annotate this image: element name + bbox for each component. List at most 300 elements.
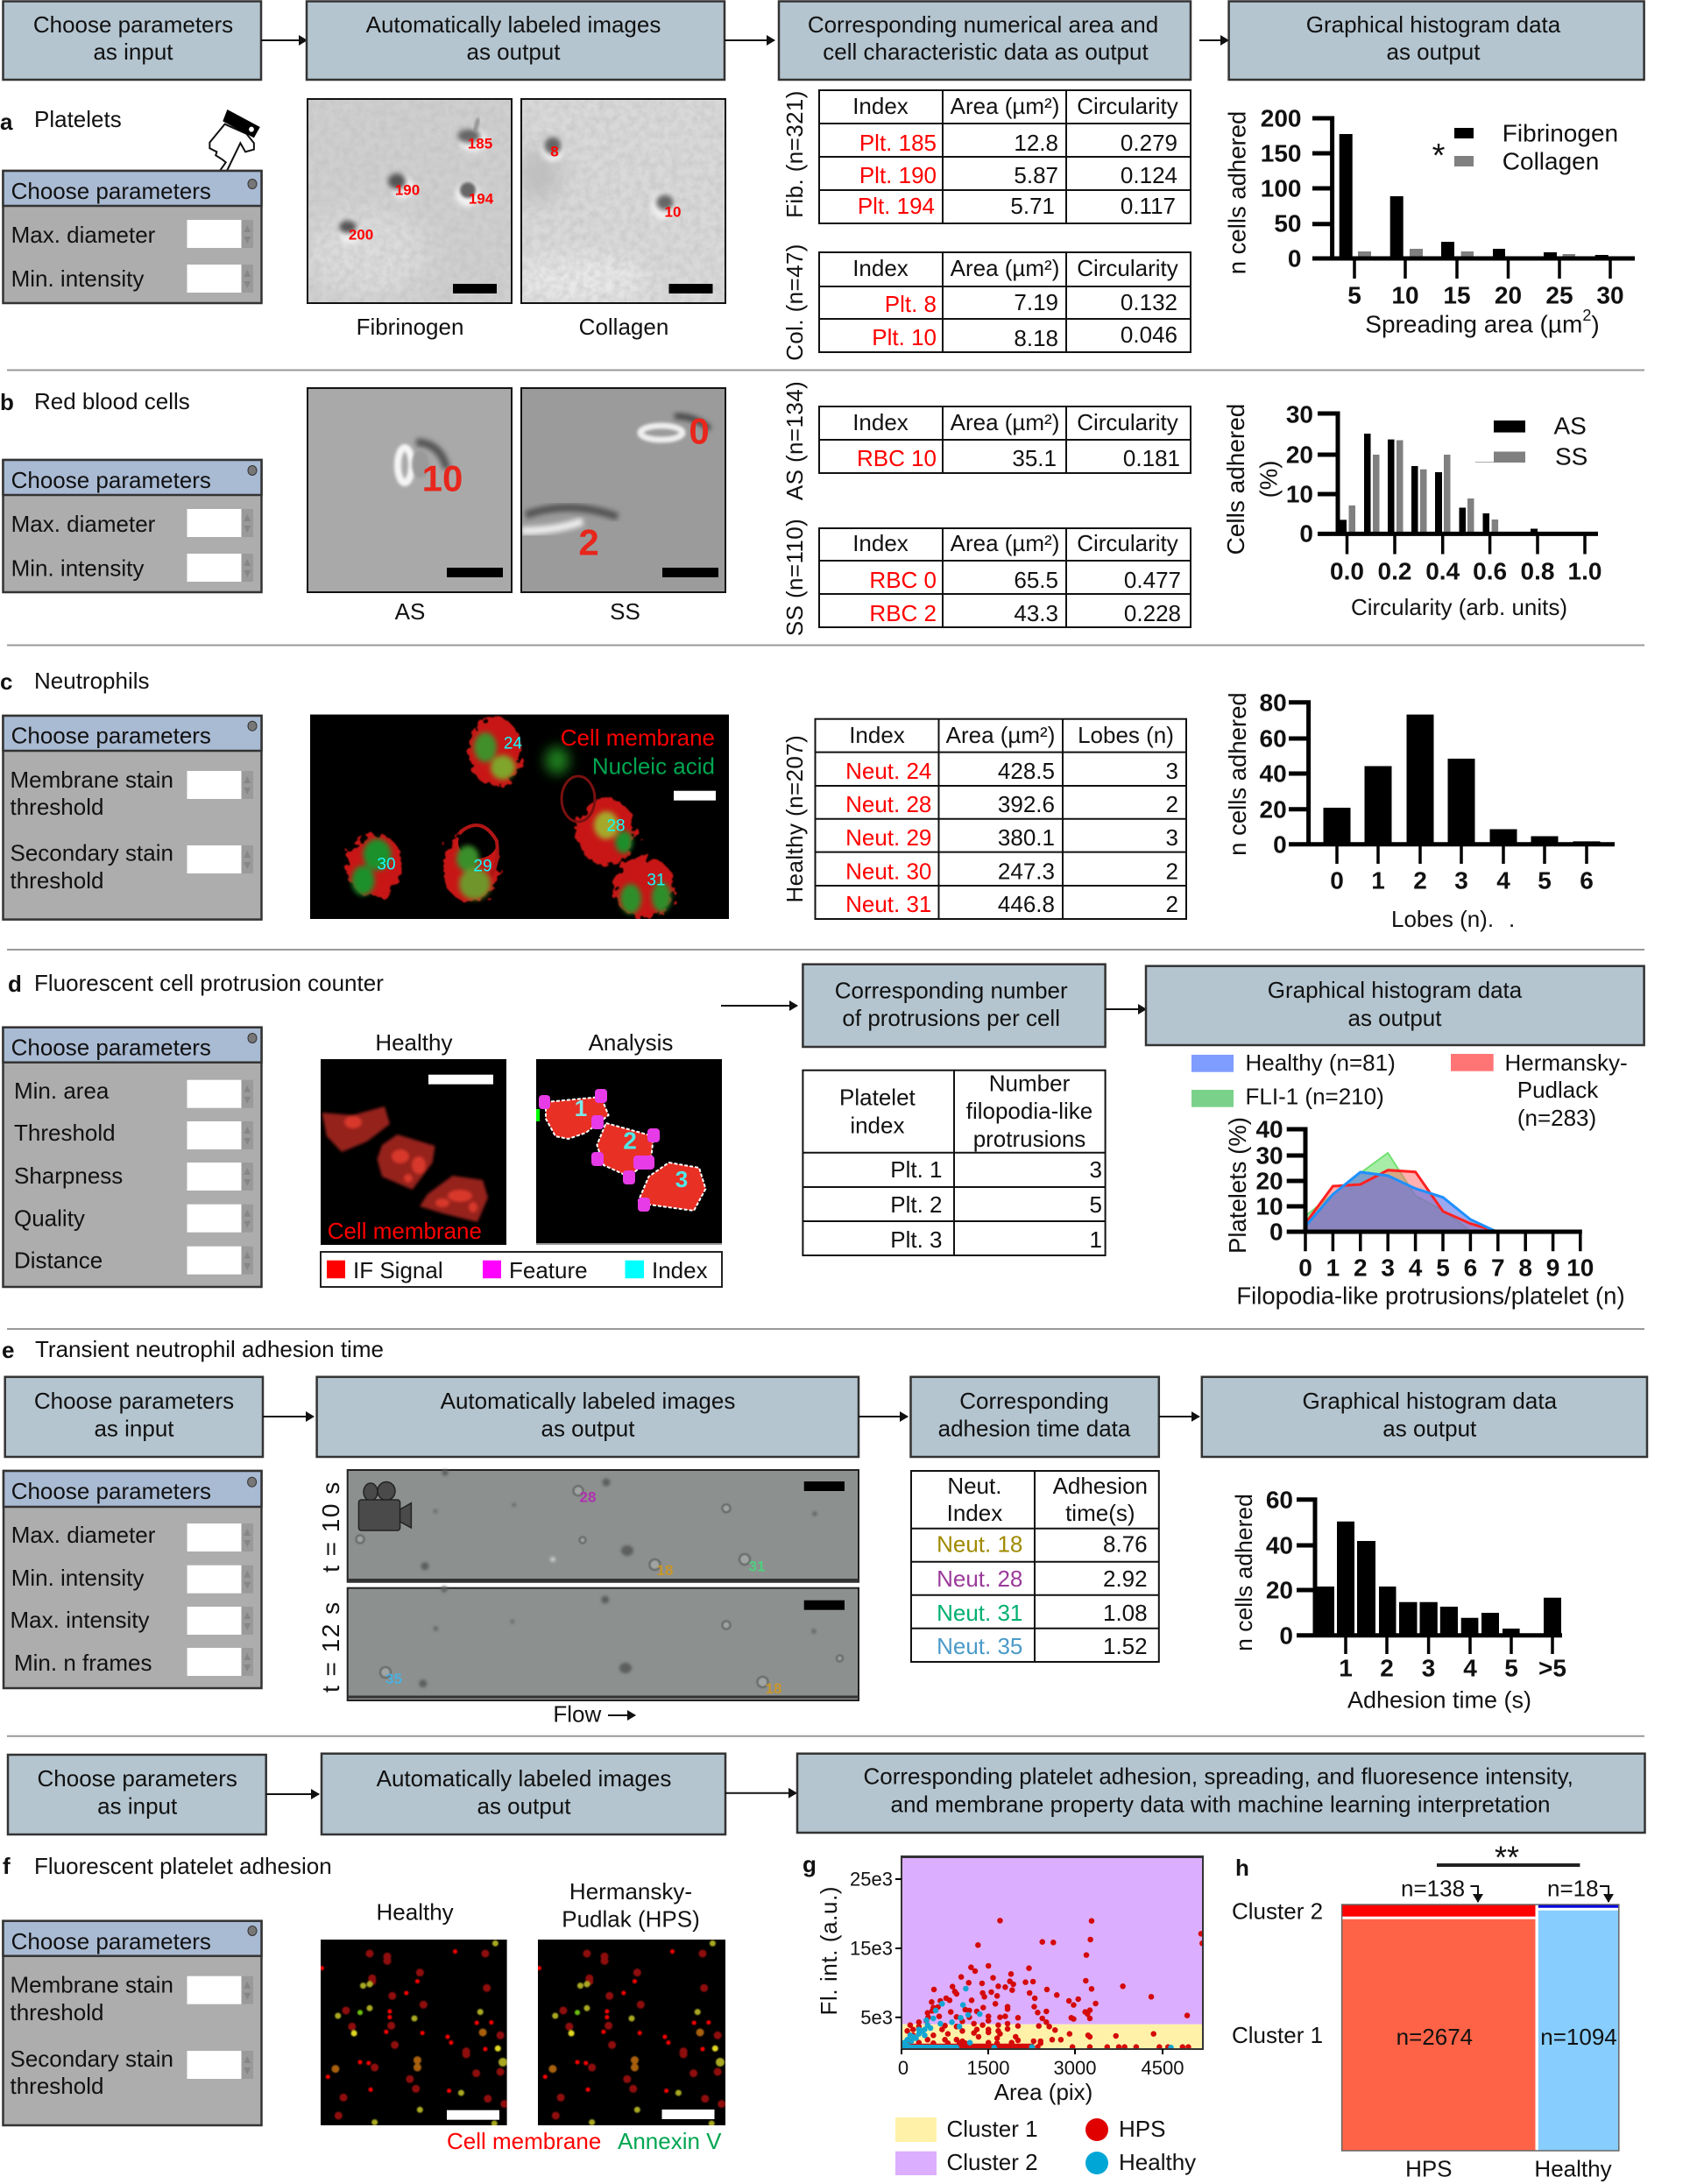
image: platelets on fibrinogen: 190 bbox=[395, 182, 420, 198]
table: neutrophils: 428.5 bbox=[998, 758, 1055, 784]
image: neutrophils fluorescence: Cell membrane bbox=[561, 724, 715, 751]
flow box: histogram data: as output bbox=[1387, 39, 1481, 65]
arrow bbox=[1159, 1416, 1199, 1417]
table: collagen platelets: 8.18 bbox=[1014, 325, 1058, 351]
legend: donor groups: Healthy (n=81) bbox=[1246, 1050, 1396, 1076]
parameter panel d bbox=[4, 1028, 261, 1287]
area chart: filopodia-like protrusions: 20 bbox=[1255, 1167, 1283, 1195]
mosaic plot: cluster by group: Cluster 2 bbox=[1232, 1898, 1323, 1925]
table: AS cells: Circularity bbox=[1077, 409, 1178, 435]
image: neutrophils fluorescence: 28 bbox=[606, 816, 626, 836]
flow box: number of protrusions: Corresponding number bbox=[835, 978, 1068, 1004]
histogram: spreading area: Fibrinogen bbox=[1503, 119, 1618, 147]
histogram: adhesion time: 0 bbox=[1279, 1622, 1293, 1649]
flow box: histogram data bbox=[1229, 2, 1644, 80]
histogram: circularity: Circularity (arb. units) bbox=[1351, 594, 1567, 620]
table: AS cells bbox=[819, 406, 1191, 473]
section d heading: Fluorescent cell protrusion counter bbox=[34, 970, 384, 996]
parameter panel f: Membrane stain bbox=[11, 1972, 173, 1998]
parameter panel d: Choose parameters bbox=[11, 1035, 211, 1061]
parameter panel b: Max. diameter bbox=[11, 511, 156, 537]
table: protrusions: 3 bbox=[1090, 1156, 1102, 1183]
flow box: choose parameters bbox=[4, 2, 261, 80]
panel h heading: h bbox=[1235, 1855, 1249, 1881]
table: protrusions: filopodia-like bbox=[966, 1098, 1092, 1124]
histogram: circularity: AS bbox=[1554, 412, 1587, 440]
caption: Hermansky-Pudlak bbox=[562, 1878, 700, 1933]
flow box: histogram data: as output bbox=[1348, 1005, 1442, 1031]
table: collagen platelets: Plt. 10 bbox=[872, 324, 937, 350]
caption: Hermansky-Pudlak: Hermansky- bbox=[569, 1878, 692, 1905]
histogram: lobes: Lobes (n). bbox=[1391, 906, 1494, 932]
image: platelets on fibrinogen: 200 bbox=[349, 226, 373, 244]
histogram: spreading area: Collagen bbox=[1503, 147, 1599, 175]
table: neutrophils bbox=[815, 719, 1186, 919]
legend: clusters and groups: Cluster 1 bbox=[946, 2116, 1038, 2142]
histogram: lobes: 3 bbox=[1454, 867, 1468, 894]
parameter panel f: Secondary stain bbox=[11, 2046, 173, 2072]
legend: image overlays bbox=[321, 1252, 722, 1287]
image: healthy platelets membrane: Cell membrane bbox=[328, 1218, 482, 1244]
table: SS cells: RBC 0 bbox=[869, 567, 937, 593]
flow box: number of protrusions: of protrusions per cell bbox=[842, 1005, 1060, 1031]
table: neutrophils: 2 bbox=[1166, 859, 1178, 885]
flow box: choose parameters bbox=[8, 1755, 266, 1834]
legend: donor groups bbox=[1191, 1050, 1628, 1131]
histogram: lobes: 80 bbox=[1260, 689, 1287, 717]
flow box: histogram data bbox=[1202, 1377, 1647, 1457]
histogram: circularity: 0.6 bbox=[1473, 557, 1507, 585]
parameter panel c: Membrane stain bbox=[11, 767, 173, 793]
table: collagen platelets: Index bbox=[852, 255, 909, 281]
scatter plot: clusters: 0 bbox=[898, 2057, 909, 2079]
table: AS cells: Index bbox=[852, 409, 909, 435]
parameter panel b: Choose parameters bbox=[11, 467, 211, 493]
section a heading bbox=[0, 106, 122, 135]
histogram: spreading area bbox=[1223, 105, 1635, 338]
histogram: circularity: 30 bbox=[1286, 401, 1313, 428]
histogram: spreading area: 0 bbox=[1288, 245, 1302, 272]
table: protrusions: protrusions bbox=[973, 1126, 1085, 1152]
table: neutrophils: 2 bbox=[1166, 791, 1178, 817]
parameter panel f: threshold bbox=[11, 1999, 103, 2025]
mosaic plot: cluster by group: ** bbox=[1495, 1840, 1519, 1875]
table: SS cells: Circularity bbox=[1077, 530, 1178, 556]
scatter plot: clusters: Area (pix) bbox=[994, 2079, 1092, 2105]
histogram: spreading area: 15 bbox=[1443, 282, 1471, 308]
flow box: numerical data: cell characteristic data as output bbox=[823, 39, 1149, 65]
caption: Fibrinogen: Fibrinogen bbox=[357, 314, 463, 340]
flow box: number of protrusions bbox=[803, 965, 1106, 1047]
flow box: numerical data: Corresponding numerical area and bbox=[808, 11, 1158, 38]
image: platelets on collagen: 8 bbox=[550, 144, 559, 159]
image: flow frame t = 10 s: 31 bbox=[749, 1558, 765, 1575]
rotated label t = 10 s: t = 10 s bbox=[317, 1481, 344, 1573]
histogram: adhesion time: >5 bbox=[1538, 1654, 1566, 1682]
histogram: lobes: 40 bbox=[1260, 760, 1287, 787]
histogram: spreading area: 10 bbox=[1391, 282, 1419, 308]
table: neutrophils: Neut. 28 bbox=[845, 791, 931, 817]
histogram: lobes: 0 bbox=[1273, 830, 1287, 859]
scatter plot: clusters: Fl. int. (a.u.) bbox=[816, 1886, 842, 2016]
table: neutrophils: 446.8 bbox=[998, 891, 1055, 917]
table: fibrinogen platelets: 12.8 bbox=[1014, 130, 1058, 156]
histogram: adhesion time: 20 bbox=[1266, 1577, 1293, 1603]
table: fibrinogen platelets: 5.71 bbox=[1010, 193, 1055, 219]
mosaic plot: cluster by group: n=138 bbox=[1401, 1876, 1465, 1902]
image: analysis of platelets bbox=[536, 1059, 722, 1245]
table: adhesion times: Index bbox=[947, 1500, 1002, 1526]
arrow bbox=[859, 1416, 908, 1417]
mosaic plot: cluster by group: n=18 bbox=[1547, 1876, 1599, 1902]
area chart: filopodia-like protrusions: 6 bbox=[1464, 1255, 1477, 1281]
image: analysis of platelets: 3 bbox=[675, 1166, 688, 1192]
histogram: spreading area: 25 bbox=[1545, 282, 1573, 308]
histogram: lobes: 60 bbox=[1260, 725, 1287, 752]
image: analysis of platelets: 2 bbox=[623, 1127, 637, 1155]
table: SS cells: Index bbox=[852, 530, 909, 556]
area chart: filopodia-like protrusions: 10 bbox=[1255, 1193, 1283, 1219]
table: AS cells: 0.181 bbox=[1123, 445, 1180, 471]
table: neutrophils: Neut. 31 bbox=[845, 891, 931, 917]
parameter panel d: Quality bbox=[14, 1205, 85, 1232]
caption: Healthy: Healthy bbox=[377, 1899, 454, 1926]
parameter panel d: Threshold bbox=[14, 1120, 116, 1146]
section b heading: b bbox=[0, 389, 14, 415]
histogram: lobes: 2 bbox=[1413, 867, 1427, 894]
image: healthy platelets fluorescence bbox=[321, 1940, 507, 2125]
area chart: filopodia-like protrusions: 0 bbox=[1269, 1218, 1283, 1246]
histogram: adhesion time: n cells adhered bbox=[1231, 1494, 1257, 1651]
area chart: filopodia-like protrusions: 5 bbox=[1436, 1255, 1450, 1281]
histogram: spreading area: 150 bbox=[1261, 140, 1302, 166]
flow direction label: Flow bbox=[553, 1701, 602, 1728]
table: adhesion times: Neut. 31 bbox=[937, 1600, 1022, 1626]
area chart: filopodia-like protrusions: 1 bbox=[1326, 1255, 1340, 1281]
flow box: choose parameters: as input bbox=[93, 39, 173, 65]
histogram: adhesion time: 1 bbox=[1339, 1654, 1353, 1682]
histogram: spreading area: 100 bbox=[1261, 175, 1302, 201]
table: neutrophils: Neut. 24 bbox=[845, 758, 931, 784]
table: fibrinogen platelets: Plt. 194 bbox=[858, 193, 935, 219]
table: adhesion times: time(s) bbox=[1065, 1500, 1135, 1526]
histogram: circularity: 0 bbox=[1299, 520, 1313, 547]
table: SS cells: 65.5 bbox=[1014, 567, 1058, 593]
rotated label Healthy: Healthy (n=207) bbox=[781, 735, 808, 903]
histogram: adhesion time: 4 bbox=[1463, 1654, 1477, 1682]
image: platelets on collagen: 10 bbox=[665, 203, 681, 221]
parameter panel c: threshold bbox=[11, 867, 103, 894]
image: SS red blood cells: 2 bbox=[578, 522, 599, 562]
arrow bbox=[1106, 1008, 1146, 1010]
image: flow frame t = 12 s bbox=[348, 1586, 859, 1700]
table: neutrophils: Lobes (n) bbox=[1078, 722, 1174, 748]
histogram: adhesion time bbox=[1231, 1486, 1566, 1714]
table: collagen platelets: 7.19 bbox=[1014, 289, 1058, 315]
scatter plot: clusters: 1500 bbox=[967, 2057, 1009, 2079]
flow box: machine learning data: and membrane property data with machine learning interpretation bbox=[891, 1791, 1550, 1817]
table: neutrophils: 380.1 bbox=[998, 824, 1055, 851]
scatter plot: clusters: 4500 bbox=[1142, 2057, 1184, 2079]
table: adhesion times: 2.92 bbox=[1103, 1566, 1148, 1592]
area chart: filopodia-like protrusions: 30 bbox=[1255, 1142, 1283, 1169]
histogram: lobes: 5 bbox=[1538, 867, 1552, 894]
flow box: automatically labeled images: Automatically labeled images bbox=[366, 11, 661, 38]
histogram: circularity: 0.0 bbox=[1330, 557, 1364, 585]
table: protrusions: index bbox=[850, 1113, 904, 1139]
table: collagen platelets: 0.132 bbox=[1121, 289, 1177, 315]
stain labels: Annexin V bbox=[618, 2128, 722, 2154]
image: flow frame t = 10 s: 18 bbox=[657, 1562, 673, 1579]
legend: donor groups: FLI-1 (n=210) bbox=[1246, 1084, 1384, 1110]
histogram: lobes: 1 bbox=[1371, 867, 1385, 894]
parameter panel f bbox=[4, 1921, 261, 2125]
section f heading: f bbox=[3, 1853, 11, 1879]
section e heading: Transient neutrophil adhesion time bbox=[35, 1336, 384, 1362]
image: neutrophils fluorescence: Nucleic acid bbox=[592, 753, 715, 780]
image: SS red blood cells bbox=[521, 388, 725, 592]
flow box: choose parameters: Choose parameters bbox=[34, 1388, 234, 1414]
parameter panel c bbox=[4, 716, 261, 920]
histogram: spreading area: 2 bbox=[1582, 307, 1591, 324]
image: flow frame t = 10 s bbox=[348, 1470, 859, 1582]
section c heading: c bbox=[0, 668, 12, 695]
table: fibrinogen platelets: Plt. 185 bbox=[859, 130, 937, 156]
histogram: spreading area: 30 bbox=[1596, 282, 1624, 308]
flow box: machine learning data bbox=[797, 1754, 1645, 1833]
scatter plot: clusters: 25e3 bbox=[850, 1868, 893, 1891]
scatter plot: clusters: 15e3 bbox=[850, 1938, 893, 1959]
histogram: lobes: 20 bbox=[1260, 795, 1287, 823]
histogram: spreading area: * bbox=[1432, 138, 1446, 174]
histogram: circularity: (%) bbox=[1255, 461, 1282, 498]
image: neutrophils fluorescence: 31 bbox=[647, 871, 666, 890]
table: SS cells: 0.477 bbox=[1124, 567, 1181, 593]
legend: image overlays: Feature bbox=[509, 1257, 588, 1283]
image: HPS platelets fluorescence bbox=[538, 1940, 725, 2125]
parameter panel e: Max. intensity bbox=[11, 1607, 149, 1633]
histogram: lobes: n cells adhered bbox=[1224, 692, 1251, 856]
parameter panel a: Min. intensity bbox=[11, 265, 144, 292]
histogram: spreading area: 20 bbox=[1495, 282, 1522, 308]
mosaic plot: cluster by group: HPS bbox=[1405, 2156, 1453, 2182]
legend: clusters and groups bbox=[895, 2116, 1196, 2175]
table: collagen platelets: Plt. 8 bbox=[885, 291, 937, 317]
flow box: choose parameters: Choose parameters bbox=[33, 11, 233, 38]
rotated label Col: Col. (n=47) bbox=[781, 244, 808, 361]
parameter panel c: Secondary stain bbox=[11, 839, 173, 866]
histogram: spreading area: 200 bbox=[1261, 105, 1302, 131]
histogram: circularity: 0.4 bbox=[1425, 557, 1460, 585]
histogram: adhesion time: 40 bbox=[1266, 1531, 1293, 1559]
area chart: filopodia-like protrusions: 7 bbox=[1491, 1255, 1505, 1281]
section b heading: Red blood cells bbox=[34, 388, 190, 414]
scatter plot: clusters bbox=[816, 1855, 1203, 2105]
histogram: lobes: 0 bbox=[1330, 867, 1344, 894]
flow box: machine learning data: Corresponding platelet adhesion, spreading, and fluoresence intensity, bbox=[864, 1763, 1573, 1790]
table: fibrinogen platelets: 0.124 bbox=[1121, 162, 1177, 188]
section a heading: a bbox=[0, 109, 13, 135]
table: fibrinogen platelets: 5.87 bbox=[1014, 162, 1058, 188]
legend: clusters and groups: Cluster 2 bbox=[946, 2149, 1038, 2175]
image: analysis of platelets: 1 bbox=[575, 1095, 587, 1121]
parameter panel a: Max. diameter bbox=[11, 222, 156, 248]
histogram: adhesion time: 3 bbox=[1422, 1654, 1435, 1682]
flow box: histogram data: Graphical histogram data bbox=[1303, 1388, 1558, 1414]
flow direction label bbox=[553, 1701, 635, 1728]
area chart: filopodia-like protrusions: 2 bbox=[1354, 1255, 1368, 1281]
parameter panel d: Sharpness bbox=[14, 1163, 123, 1189]
area chart: filopodia-like protrusions: 3 bbox=[1381, 1255, 1395, 1281]
table: SS cells bbox=[819, 528, 1191, 627]
table: protrusions: Plt. 2 bbox=[890, 1191, 943, 1218]
table: fibrinogen platelets: 0.279 bbox=[1121, 130, 1177, 156]
arrow bbox=[721, 1005, 797, 1007]
table: adhesion times: Neut. 35 bbox=[937, 1633, 1022, 1659]
histogram: adhesion time: Adhesion time (s) bbox=[1347, 1687, 1531, 1714]
flow box: automatically labeled images bbox=[317, 1377, 859, 1457]
image: neutrophils fluorescence: 30 bbox=[377, 855, 396, 874]
flow box: adhesion time data: Corresponding bbox=[959, 1388, 1109, 1414]
caption: Analysis: Analysis bbox=[589, 1029, 673, 1056]
image: platelets on fibrinogen: 194 bbox=[469, 191, 494, 207]
table: collagen platelets bbox=[819, 252, 1191, 352]
arrow bbox=[725, 1792, 796, 1794]
mosaic plot: cluster by group: Cluster 1 bbox=[1232, 2022, 1323, 2048]
mosaic plot: cluster by group: Healthy bbox=[1534, 2156, 1612, 2182]
flow box: adhesion time data: adhesion time data bbox=[938, 1416, 1131, 1442]
caption: AS: AS bbox=[395, 598, 425, 625]
image: platelets on fibrinogen: 185 bbox=[468, 135, 492, 152]
caption: Collagen: Collagen bbox=[579, 314, 668, 340]
flow box: automatically labeled images bbox=[322, 1754, 725, 1834]
flow box: choose parameters: Choose parameters bbox=[38, 1765, 237, 1792]
stain labels bbox=[447, 2128, 722, 2154]
parameter panel c: Choose parameters bbox=[11, 723, 211, 749]
area chart: filopodia-like protrusions: 10 bbox=[1566, 1255, 1594, 1281]
table: adhesion times: Neut. 28 bbox=[937, 1566, 1022, 1592]
area chart: filopodia-like protrusions: Platelets (%) bbox=[1224, 1117, 1251, 1254]
table: protrusions: Plt. 1 bbox=[890, 1156, 943, 1183]
histogram: spreading area: Spreading area (µm bbox=[1365, 310, 1582, 338]
histogram: adhesion time: 60 bbox=[1266, 1486, 1293, 1514]
table: collagen platelets: Circularity bbox=[1077, 255, 1178, 281]
table: SS cells: 0.228 bbox=[1124, 600, 1181, 626]
rotated label AS: AS (n=134) bbox=[781, 381, 808, 500]
table: neutrophils: 247.3 bbox=[998, 859, 1055, 885]
icon: video camera bbox=[358, 1482, 411, 1530]
flow box: adhesion time data bbox=[911, 1377, 1159, 1457]
table: collagen platelets: 0.046 bbox=[1121, 322, 1177, 348]
flow box: choose parameters bbox=[5, 1377, 263, 1457]
histogram: lobes: 6 bbox=[1580, 867, 1594, 894]
image: platelets on fibrinogen bbox=[307, 99, 512, 303]
area chart: filopodia-like protrusions: 9 bbox=[1546, 1255, 1559, 1281]
histogram: circularity: 1.0 bbox=[1568, 557, 1602, 585]
area chart: filopodia-like protrusions: 0 bbox=[1298, 1255, 1312, 1281]
section f heading: Fluorescent platelet adhesion bbox=[34, 1853, 332, 1879]
stain labels: Cell membrane bbox=[447, 2128, 601, 2154]
histogram: spreading area: 5 bbox=[1347, 282, 1361, 308]
table: neutrophils: Index bbox=[849, 722, 905, 748]
image: healthy platelets membrane bbox=[321, 1059, 506, 1245]
table: protrusions: Platelet bbox=[839, 1085, 916, 1111]
histogram: circularity: Cells adhered bbox=[1222, 404, 1249, 555]
table: protrusions: 1 bbox=[1090, 1226, 1102, 1253]
image: AS red blood cell bbox=[308, 388, 512, 592]
table: AS cells: Area (µm²) bbox=[951, 409, 1059, 435]
arrow bbox=[263, 1416, 314, 1417]
mosaic plot: cluster by group: n=2674 bbox=[1396, 2024, 1473, 2050]
table: fibrinogen platelets bbox=[819, 90, 1191, 223]
table: adhesion times: Neut. 18 bbox=[937, 1531, 1022, 1558]
scatter plot: clusters: 3000 bbox=[1054, 2057, 1096, 2079]
histogram: adhesion time: 5 bbox=[1504, 1654, 1518, 1682]
table: neutrophils: 3 bbox=[1166, 758, 1178, 784]
section c heading: Neutrophils bbox=[34, 668, 150, 694]
table: protrusions: 5 bbox=[1090, 1191, 1102, 1218]
parameter panel d: Distance bbox=[14, 1247, 103, 1274]
image: neutrophils fluorescence bbox=[310, 715, 729, 919]
histogram: lobes bbox=[1224, 689, 1615, 932]
parameter panel e: Choose parameters bbox=[11, 1478, 211, 1504]
area chart: filopodia-like protrusions: 4 bbox=[1409, 1255, 1423, 1281]
histogram: adhesion time: 2 bbox=[1380, 1654, 1394, 1682]
rotated label Fib: Fib. (n=321) bbox=[781, 90, 808, 218]
legend: donor groups: Pudlack bbox=[1517, 1077, 1599, 1103]
flow box: automatically labeled images: as output bbox=[467, 39, 561, 65]
image: AS red blood cell: 10 bbox=[422, 457, 463, 499]
area chart: filopodia-like protrusions: Filopodia-like protrusions/platelet (n) bbox=[1236, 1283, 1625, 1309]
flow box: histogram data: as output bbox=[1382, 1416, 1477, 1442]
table: fibrinogen platelets: 0.117 bbox=[1121, 193, 1176, 219]
mosaic plot: cluster by group: n=1094 bbox=[1540, 2024, 1617, 2050]
table: fibrinogen platelets: Circularity bbox=[1077, 93, 1178, 119]
icon: pointing hand bbox=[209, 110, 260, 176]
rotated label t = 12 s: t = 12 s bbox=[317, 1601, 344, 1693]
caption: SS: SS bbox=[610, 598, 640, 625]
flow box: choose parameters: as input bbox=[94, 1416, 174, 1442]
histogram: spreading area: 50 bbox=[1274, 210, 1302, 237]
table: neutrophils: 392.6 bbox=[998, 791, 1055, 817]
arrow bbox=[1199, 39, 1228, 41]
section d heading: d bbox=[8, 971, 22, 997]
histogram: spreading area: n cells adhered bbox=[1223, 111, 1251, 274]
parameter panel a: Choose parameters bbox=[11, 178, 211, 204]
legend: donor groups: (n=283) bbox=[1517, 1105, 1596, 1131]
parameter panel e: Max. diameter bbox=[11, 1522, 156, 1548]
table: SS cells: Area (µm²) bbox=[951, 530, 1059, 556]
arrow bbox=[261, 39, 307, 41]
parameter panel c: threshold bbox=[11, 794, 103, 820]
flow box: numerical data bbox=[779, 2, 1191, 80]
flow box: histogram data: Graphical histogram data bbox=[1306, 11, 1561, 38]
legend: clusters and groups: Healthy bbox=[1119, 2149, 1196, 2175]
legend: image overlays: IF Signal bbox=[353, 1257, 443, 1283]
table: protrusions: Number bbox=[989, 1071, 1071, 1097]
image: SS red blood cells: 0 bbox=[689, 410, 710, 452]
image: flow frame t = 12 s: 35 bbox=[385, 1671, 402, 1687]
section e heading: e bbox=[2, 1337, 14, 1363]
histogram: circularity: SS bbox=[1555, 443, 1587, 470]
parameter panel b: Min. intensity bbox=[11, 555, 144, 582]
table: neutrophils: 2 bbox=[1166, 891, 1178, 917]
parameter panel e bbox=[4, 1471, 261, 1688]
rotated label SS: SS (n=110) bbox=[781, 519, 808, 636]
flow box: automatically labeled images bbox=[307, 2, 725, 80]
image: neutrophils fluorescence: 29 bbox=[473, 857, 492, 876]
table: fibrinogen platelets: Area (µm²) bbox=[951, 93, 1059, 119]
